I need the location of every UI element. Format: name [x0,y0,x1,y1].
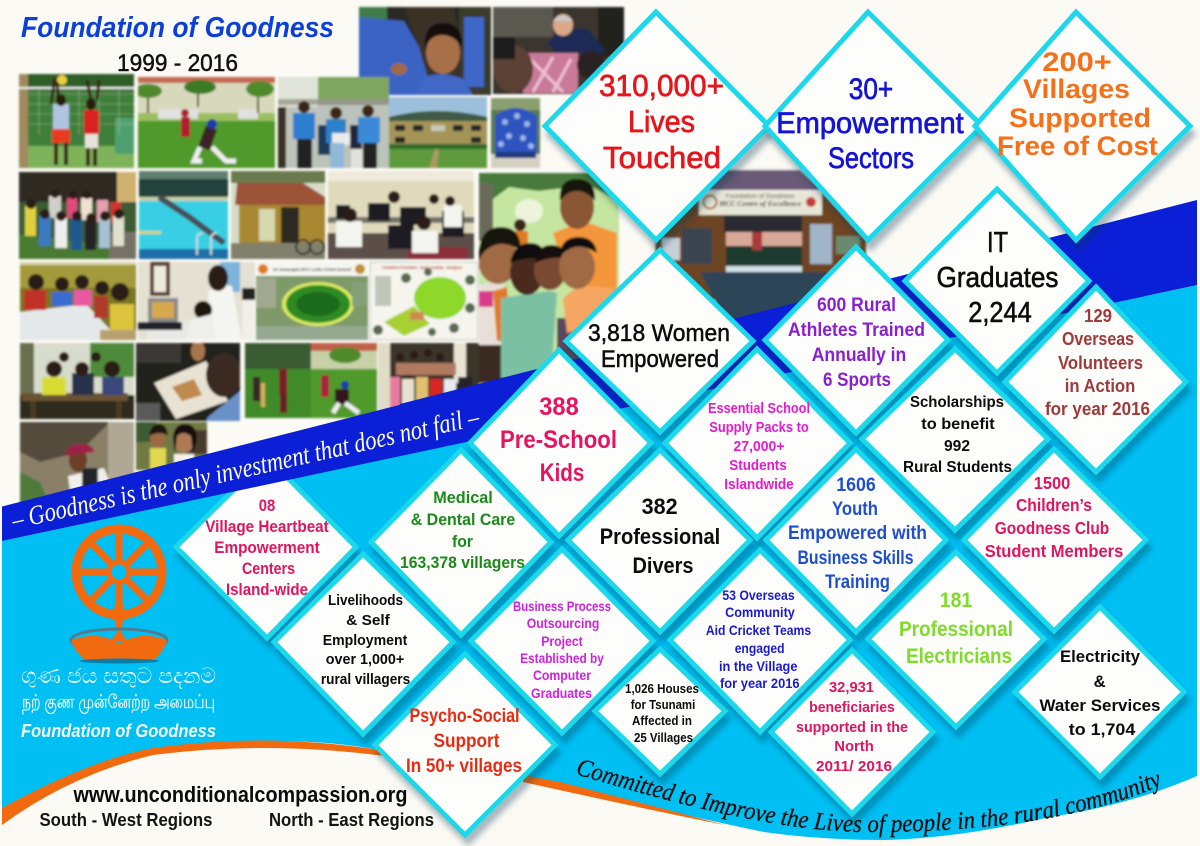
photo: crowd in blue [489,96,542,169]
diamond: scholarships: Rural Students [903,459,1012,476]
diamond: psycho-social support: In 50+ villages [406,756,522,777]
diamond: lives touched: 310,000+ [599,68,724,103]
diamond: overseas cricket teams: 53 Overseas [722,588,795,603]
diamond: business process outsourcing: Graduates [531,686,592,701]
diamond: business process outsourcing: Established by [520,651,604,666]
diamond: overseas volunteers [1005,287,1186,472]
background: cyan swoosh [2,285,1197,840]
diamond: tsunami houses [595,649,725,774]
diamond: livelihoods: & Self [346,612,391,629]
photo: men in blue shirts [276,75,390,170]
orange curve right [523,775,725,825]
logo: dharma wheel and lotus [71,529,167,664]
diamond: livelihoods: over 1,000+ [326,651,404,668]
diamond: children's goodness club: Children’s [1016,495,1092,515]
diamond: lives touched [545,12,769,240]
diamond: empowerment sectors: Sectors [828,142,914,175]
diamond: professional electricians [868,552,1044,727]
diamond: children's goodness club: 1500 [1034,473,1070,493]
diamond: youth business skills: Training [825,572,890,593]
photo: school building [388,95,489,170]
diamond: children's goodness club [964,449,1146,631]
diamond: school supply packs: 27,000+ [734,439,784,455]
diamond: tsunami houses: 25 Villages [634,730,693,745]
diamond: youth business skills: Empowered with [788,523,927,544]
diamond: scholarships [862,349,1048,530]
diamond: women empowered [566,250,753,432]
diamond: electricity and water: Water Services [1040,696,1160,715]
diamond: village heartbeat: Empowerment [214,539,320,557]
photo: swimming pool [137,170,230,261]
regions: north-east: North - East Regions [269,810,434,830]
diamond: overseas cricket teams [670,550,850,732]
diamond: tsunami houses: Affected in [632,713,692,728]
diamond: women empowered: Empowered [601,346,719,373]
photo: MCC Centre of Excellence entrance [650,168,868,319]
diamond: children's goodness club: Student Members [985,541,1124,561]
diamond: medical care [371,450,551,635]
diamond: pre-school kids: Pre-School [500,426,617,454]
diamond: villages supported [975,12,1190,240]
sign: MCC Centre of Excellence: Foundation of Goodness [726,194,794,200]
diamond: IT graduates: IT [987,227,1008,259]
diamond: professional divers: Divers [632,553,694,578]
diamond: youth business skills: 1606 [836,475,876,496]
diamond: north beneficiaries: 32,931 [829,679,874,696]
diamond: north beneficiaries: supported in the [796,719,908,736]
diamond: IT graduates: Graduates [936,262,1058,294]
photo: volleyball [17,72,136,170]
diamond: tsunami houses: 1,026 Houses [625,681,699,696]
photo: children in a circle [17,170,138,261]
diamond: professional divers: 382 [642,494,678,519]
diamond: youth business skills: Youth [832,499,878,520]
diamond: overseas cricket teams: in the Village [719,659,798,674]
diamond: IT graduates [905,189,1089,373]
logo text: Sinhala name: ගුණ ජය සතුට පදනම [21,665,216,689]
diamond: village heartbeat: Island-wide [226,581,308,599]
diamond: school supply packs: Students [729,458,787,474]
diamond: overseas cricket teams: engaged [735,641,784,656]
diamond: livelihoods: Livelihoods [328,592,403,609]
photo: two smiling girls [134,420,209,472]
diamond: villages supported: 200+ [1042,47,1112,77]
photo: sports academy map [368,260,480,342]
photo: small house [229,169,327,260]
diamond: professional electricians: 181 [940,589,972,612]
diamond: overseas cricket teams: Aid Cricket Teams [706,623,811,638]
diamond: village heartbeat [176,457,356,638]
diamond: villages supported: Villages [1023,74,1130,104]
diamond: pre-school kids: Kids [540,459,584,487]
diamond: pre-school kids: 388 [539,393,579,421]
diamond: medical care: for [452,533,474,551]
diamond: village heartbeat: Village Heartbeat [205,518,329,536]
diamond: pre-school kids [470,350,651,536]
photo: cricket batsman on lawn [136,75,277,170]
photo collage [19,7,866,504]
sign: MCC Centre of Excellence: MCC Centre of Excellence [718,199,802,208]
diamond: professional electricians: Electricians [906,645,1012,668]
diamond: empowerment sectors: 30+ [849,73,893,106]
diamond: villages supported: Supported [1009,103,1151,133]
photo: computer lab [326,169,476,260]
diamond: youth business skills [766,449,946,632]
photo: children at table [18,260,138,342]
diamond: women empowered: 3,818 Women [588,320,730,347]
diamond: villages supported: Free of Cost [997,131,1158,161]
diamond: IT graduates: 2,244 [968,297,1032,329]
years heading: 1999 - 2016 [117,50,238,77]
diamond: overseas volunteers: for year 2016 [1045,399,1150,419]
diamond: school supply packs [665,349,850,538]
diamond: north beneficiaries: North [834,738,874,755]
diamond: electricity and water: & [1094,672,1106,691]
diamond: electricity and water: to 1,704 [1069,720,1136,739]
title: Foundation of Goodness [21,12,334,44]
diamond: professional divers: Professional [600,524,720,549]
logo text: Tamil name: நற் குண முன்னேற்ற அமைப்பு [22,692,215,714]
diamond: scholarships: to benefit [921,416,995,433]
photo: children at desks [18,341,136,421]
diamond: business process outsourcing: Computer [533,668,592,683]
diamond: school supply packs: Islandwide [724,477,794,493]
diamond: tsunami houses: for Tsunami [631,697,695,712]
diamond: scholarships: 992 [944,438,970,455]
slogan: committed to improve lives: Committed to Improve the Lives of people in the rural community [578,760,1159,838]
diamond: psycho-social support: Psycho-Social [410,706,520,727]
photo: group of smiling boys [477,171,620,384]
photo: crowd of cheering children [376,341,481,411]
diamond: rural athletes: 600 Rural [817,295,896,316]
diamond: school supply packs: Essential School [708,401,810,417]
diamond: north beneficiaries [771,650,933,814]
diamond: scholarships: Scholarships [910,394,1004,411]
sign: MCC Centre of Excellence [699,192,822,215]
diamond: overseas volunteers: Volunteers [1058,353,1143,373]
diamond: psycho-social support [375,654,555,835]
diamond: business process outsourcing: Outsourcing [527,616,599,631]
photo: cricket ground plan [254,262,370,342]
diamond: overseas volunteers: 129 [1084,306,1112,326]
diamond: professional electricians: Professional [899,618,1013,641]
diamond: business process outsourcing: Project [541,634,583,649]
photo: girl in blue uniform [357,5,493,97]
diamond: village heartbeat: 08 [259,497,275,515]
diamond: business process outsourcing [471,549,653,733]
diamond: professional divers [568,450,750,632]
diamond: empowerment sectors: Empowerment [776,107,964,140]
diamond: medical care: 163,378 villagers [400,554,525,572]
diamond: medical care: & Dental Care [411,511,515,529]
band: ribbon right section [400,200,1197,456]
orange curve left [2,740,392,825]
diamond: rural athletes [765,247,948,433]
photo: drawing in a book [134,342,242,423]
diamond: business process outsourcing: Business Process [513,599,611,614]
diamond: livelihoods [274,554,453,734]
diamond: overseas volunteers: in Action [1065,376,1135,396]
band: slogan ribbon [2,371,532,541]
diamond: overseas cricket teams: for year 2016 [720,676,800,691]
photo: nurse with computer [136,260,257,342]
diamond: livelihoods: Employment [323,632,407,649]
photo: boy in maroon cap [18,420,136,502]
diamond: livelihoods: rural villagers [321,671,410,688]
diamond: rural athletes: Athletes Trained [788,320,925,341]
slogan text: – Goodness is the only investment that does not fail – [8,401,482,535]
diamond: electricity and water: Electricity [1060,647,1141,666]
diamond: north beneficiaries: 2011/ 2016 [816,758,892,775]
diamond: overseas cricket teams: Community [725,605,795,620]
diamond: youth business skills: Business Skills [798,548,914,569]
diamond: lives touched: Lives [628,104,695,139]
photo: man with bicycles [491,5,626,96]
diamond: school supply packs: Supply Packs to [709,420,809,436]
diamond: medical care: Medical [433,489,493,507]
regions: south-west: South - West Regions [40,810,212,830]
photo: cricket ground plan: Sri Sumangala MCC Lords Cricket Ground [273,267,351,272]
diamond: rural athletes: 6 Sports [823,370,891,391]
diamond: overseas volunteers: Overseas [1062,329,1134,349]
diamond: psycho-social support: Support [434,731,500,752]
diamond: north beneficiaries: beneficiaries [809,699,895,716]
photo: cricket match [243,341,378,420]
diamond: electricity and water [1015,607,1184,777]
diamond: children's goodness club: Goodness Club [995,518,1109,538]
diamond: lives touched: Touched [603,140,721,175]
diamond: rural athletes: Annually in [812,345,906,366]
diamond: empowerment sectors [765,12,982,240]
diamond: village heartbeat: Centers [242,560,295,578]
website url: www.unconditionalcompassion.org [73,782,408,807]
logo text: Foundation of Goodness: Foundation of Goodness [21,721,216,741]
